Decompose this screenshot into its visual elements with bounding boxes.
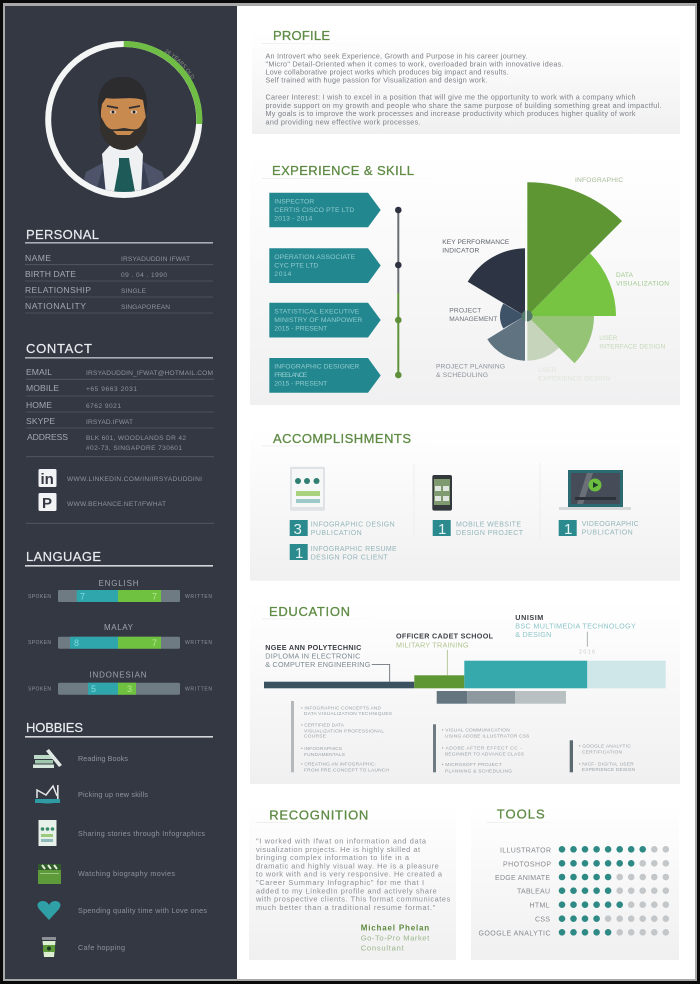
item: mobile website <box>433 520 524 538</box>
course list: infographics: COURSE <box>304 734 326 740</box>
icon: linkedin <box>38 469 56 488</box>
section: contact: +65 9663 2031 <box>86 386 137 393</box>
panel: sidebar <box>5 6 237 979</box>
profile text: "Micro" Detail-Oriented when it comes to work, overloaded brain with innovative ideas. <box>266 60 564 68</box>
course list: design tools: • ADOBE AFTER EFFECT CC - <box>442 746 522 752</box>
testimonial quote <box>255 836 451 912</box>
tool labels: GOOGLE ANALYTIC <box>478 930 550 937</box>
heading: accomplishments: ACCOMPLISHMENTS <box>273 431 411 446</box>
section: hobbies: Spending quality time with Love ones <box>78 906 207 915</box>
section: personal: IRSYADUDDIN IFWAT <box>121 256 190 263</box>
section: personal: PERSONAL <box>26 227 99 242</box>
chart labels: INDICATOR <box>442 248 480 255</box>
experience arrows: CYC PTE LTD <box>274 262 318 270</box>
course list: certifications: EXPERIENCE DESIGN <box>582 767 636 773</box>
course list: certifications: • GOOGLE ANALYTIC <box>579 743 631 749</box>
tool labels: TABLEAU <box>517 889 550 896</box>
icon: heart <box>38 901 60 920</box>
section: contact: CONTACT <box>26 341 92 356</box>
education labels <box>265 613 636 669</box>
section: personal: NATIONALITY <box>25 301 86 311</box>
course list: infographics: • INFOGRAPHICS <box>301 746 342 752</box>
tool labels: CSS <box>535 917 550 924</box>
course list: infographics: FROM PRE-CONCEPT TO LAUNCH <box>304 768 390 774</box>
icon: linkedin: in <box>40 471 54 488</box>
education labels: DIPLOMA IN ELECTRONIC <box>265 652 360 660</box>
course list: design tools <box>433 724 529 774</box>
item: mobile website: DESIGN PROJECT <box>456 530 524 537</box>
item: videographic: PUBLICATION <box>582 530 633 536</box>
section: personal: SINGAPOREAN <box>121 304 170 311</box>
chart labels: PROJECT <box>449 308 481 314</box>
english bar: 7 <box>152 592 157 602</box>
section: hobbies: Picking up new skills <box>78 790 148 799</box>
testimonial quote: "Career Summary Infographic" for me that I <box>256 878 424 887</box>
course list: infographics: • CERTIFIED DATA <box>301 723 345 729</box>
section: hobbies: Sharing stories through Infographics <box>78 829 205 838</box>
testimonial quote: dramatic and highly visual way. He is a pleasure <box>256 861 439 870</box>
section: hobbies: HOBBIES <box>26 720 83 735</box>
course list: infographics: DATA VISUALIZATION TECHNIQUES <box>304 711 392 717</box>
section: personal: 09 . 04 . 1990 <box>121 272 167 279</box>
section: contact: EMAIL <box>26 367 52 377</box>
experience arrows: FREELANCE <box>274 372 308 379</box>
item: infographic publication <box>290 520 395 538</box>
panel: experience and skill <box>250 155 680 405</box>
item: videographic: 1 <box>564 521 572 538</box>
chart labels: USER <box>538 367 557 374</box>
education labels: MILITARY TRAINING <box>396 640 469 649</box>
section: hobbies: Reading Books <box>78 754 128 763</box>
testimonial quote: visualization projects. He is highly skilled at <box>256 845 420 854</box>
experience arrows: 2015 - PRESENT <box>274 326 327 332</box>
testimonial quote: "I worked with Ifwat on information and data <box>256 836 427 846</box>
education timeline bars: 2016 <box>579 650 595 656</box>
profile text <box>266 52 662 126</box>
experience arrows <box>269 193 381 393</box>
experience arrows: OPERATION ASSOCIATE <box>274 254 356 261</box>
section: personal: SINGLE <box>121 288 147 295</box>
profile text: Career Interest: I wish to excel in a position that will give me the opportunity to work with a company which <box>266 92 635 102</box>
section: personal: NAME <box>25 253 51 263</box>
course list: infographics: VISUALIZATION PROFESSIONAL <box>304 728 384 734</box>
testimonial author: Michael Phelan <box>361 924 429 933</box>
heading: tools: TOOLS <box>497 806 545 822</box>
education labels: NGEE ANN POLYTECHNIC <box>265 643 361 652</box>
course list: certifications: CERTIFICATION <box>582 749 623 755</box>
chart labels: MANAGEMENT <box>449 316 497 323</box>
avatar with age ring <box>45 41 202 198</box>
item: mobile website: MOBILE WEBSITE <box>456 522 521 528</box>
chart labels <box>436 177 669 382</box>
malay bar: 7 <box>152 638 157 648</box>
section: contact: HOME <box>26 400 52 410</box>
course list: infographics: • INFOGRAPHIC CONCEPTS AND <box>301 705 382 711</box>
indonesian bar: SPOKEN <box>28 686 51 692</box>
indonesian bar: 5 <box>91 684 96 694</box>
section: contact: #02-73, SINGAPORE 730601 <box>86 445 182 452</box>
english bar: WRITTEN <box>185 594 212 600</box>
education timeline bars <box>264 632 666 704</box>
experience arrows: 2013 - 2014 <box>274 216 313 222</box>
experience arrows: MINISTRY OF MANPOWER <box>274 317 362 324</box>
item: mobile website: 1 <box>438 521 446 538</box>
indonesian bar: 3 <box>127 684 132 694</box>
tool rating dots <box>559 846 669 936</box>
chart labels: INFOGRAPHIC <box>575 177 623 184</box>
icon: tablet <box>290 467 325 511</box>
testimonial author: Go-To-Pro Market <box>361 934 430 943</box>
profile text: My goals is to improve the work processes and increase productivity which produces higher quality of work <box>266 109 636 118</box>
avatar with age ring: 26 YEARS OLD <box>164 49 194 78</box>
icon: behance: P <box>42 495 52 512</box>
malay bar: MALAY <box>104 623 134 632</box>
malay bar: SPOKEN <box>28 640 51 646</box>
item: videographic: VIDEOGRAPHIC <box>582 521 639 528</box>
panel: education <box>250 600 680 784</box>
course list: certifications <box>570 740 636 773</box>
panel: accomplishments <box>250 430 680 581</box>
heading: experience: EXPERIENCE & SKILL <box>272 163 414 178</box>
icon: skills <box>35 785 60 804</box>
heading: recognition: RECOGNITION <box>269 808 368 822</box>
chart labels: INTERFACE DESIGN <box>599 344 666 350</box>
experience timeline <box>395 207 402 378</box>
malay bar: WRITTEN <box>185 640 212 646</box>
section: contact: 6762 9021 <box>86 403 121 410</box>
section: contact <box>25 341 214 523</box>
section: language: LANGUAGE <box>26 549 101 564</box>
profile text: Self trained with huge passion for Visualization and design work. <box>266 76 488 84</box>
malay bar: 8 <box>74 638 79 648</box>
section: hobbies: Cafe hopping <box>78 943 125 952</box>
indonesian bar <box>28 670 212 695</box>
icon: laptop <box>559 470 631 510</box>
course list: infographics <box>291 701 392 774</box>
item: resume design <box>290 544 397 562</box>
course list: infographics: FUNDAMENTALS <box>304 752 345 758</box>
course list: design tools: BEGINNER TO ADVANCE CLASS <box>445 752 524 758</box>
education labels: OFFICER CADET SCHOOL <box>396 632 494 641</box>
item: videographic <box>559 520 639 538</box>
course list: design tools: USING ADOBE ILLUSTRATOR CS6 <box>445 734 529 740</box>
icon: infographic sheet <box>38 820 56 846</box>
section: contact: SKYPE <box>26 416 55 426</box>
experience arrows: INSPECTOR <box>274 198 314 206</box>
english bar: ENGLISH <box>98 579 139 588</box>
section: contact: BLK 601, WOODLANDS DR 42 <box>86 435 186 442</box>
chart labels: & SCHEDULING <box>436 372 488 379</box>
icon: behance <box>38 493 56 512</box>
icon: clapperboard <box>38 864 61 884</box>
course list: certifications: • NICF- DIGITAL USER <box>579 761 634 767</box>
icon: books <box>33 749 62 768</box>
section: hobbies: Watching biography movies <box>78 869 175 878</box>
item: infographic publication: INFOGRAPHIC DESIGN <box>311 522 395 528</box>
tool labels: EDGE ANIMATE <box>495 875 550 882</box>
chart labels: VISUALIZATION <box>616 280 669 288</box>
section: hobbies <box>25 720 213 957</box>
panel: tools <box>471 802 679 960</box>
section: language <box>25 549 213 695</box>
testimonial quote: to work with and is very responsive. He created a <box>256 870 443 879</box>
chart labels: PROJECT PLANNING <box>436 364 505 370</box>
education labels: UNISIM <box>515 613 543 622</box>
item: resume design: INFOGRAPHIC RESUME <box>311 546 397 553</box>
education labels: & DESIGN <box>515 630 551 639</box>
section: contact: MOBILE <box>26 383 59 393</box>
testimonial quote: much better than a traditional resume format." <box>256 903 436 912</box>
course list: design tools: • MICROSOFT PROJECT <box>442 762 502 768</box>
item: resume design: 1 <box>295 545 303 562</box>
english bar: 7 <box>80 592 85 602</box>
heading: profile: PROFILE <box>273 28 330 43</box>
section: personal: BIRTH DATE <box>25 269 76 279</box>
section: contact: ADDRESS <box>27 432 68 442</box>
chart labels: DATA <box>616 272 634 279</box>
experience arrows: INFOGRAPHIC DESIGNER <box>274 364 359 370</box>
item: infographic publication: 3 <box>294 521 302 538</box>
profile text: and providing new effective work processes. <box>266 117 420 126</box>
testimonial author: Consultant <box>361 943 405 952</box>
heading: education <box>262 604 387 619</box>
heading: tools <box>487 806 577 823</box>
testimonial quote: added to my LinkedIn profile and actively share <box>256 886 437 895</box>
profile text: provide support on my growth and people who share the same purpose of building something great and impactful. <box>266 101 662 110</box>
heading: profile <box>262 28 372 44</box>
testimonial quote: with prospective clients. This format communicates <box>255 895 451 904</box>
experience arrows: CERTIS CISCO PTE LTD <box>274 207 354 214</box>
experience arrows: 2014 <box>274 271 292 278</box>
chart labels: EXPERIENCE DESIGN <box>538 376 611 382</box>
section: personal: RELATIONSHIP <box>25 285 91 295</box>
panel: recognition <box>249 802 456 960</box>
heading: education: EDUCATION <box>269 604 350 619</box>
testimonial quote: bringing complex information to life in a <box>256 853 410 862</box>
course list: design tools: • VISUAL COMMUNICATION <box>442 728 510 734</box>
profile text: An Introvert who seek Experience, Growth and Purpose in his career journey. <box>266 52 528 60</box>
chart labels: USER <box>599 335 618 342</box>
tool labels <box>478 848 551 937</box>
indonesian bar: WRITTEN <box>185 686 212 692</box>
experience arrows: STATISTICAL EXECUTIVE <box>274 308 360 316</box>
tool labels: HTML <box>530 903 550 910</box>
item: infographic publication: PUBLICATION <box>311 530 362 537</box>
english bar <box>28 579 212 602</box>
indonesian bar: INDONESIAN <box>90 670 147 680</box>
english bar: SPOKEN <box>28 594 51 600</box>
malay bar <box>28 623 212 649</box>
tool labels: ILLUSTRATOR <box>500 848 551 854</box>
section: contact: IRSYAD.IFWAT <box>86 419 133 426</box>
profile text: Love collaborative project works which produces big impact and results. <box>266 68 508 76</box>
icon: coffee cup <box>42 937 56 957</box>
tool labels: PHOTOSHOP <box>503 862 551 868</box>
section: personal <box>25 227 213 313</box>
chart labels: KEY PERFORMANCE <box>442 239 510 246</box>
education labels: BSC MULTIMEDIA TECHNOLOGY <box>515 622 636 631</box>
polar skill chart <box>468 182 622 363</box>
education labels: & COMPUTER ENGINEERING <box>265 660 371 669</box>
panel: profile <box>252 28 680 134</box>
course list: design tools: PLANNING & SCHEDULING <box>445 768 512 774</box>
icon: phone <box>432 475 452 511</box>
course list: infographics: • CREATING AN INFOGRAPHIC: <box>301 762 376 768</box>
section: contact: WWW.BEHANCE.NET/IFWHAT <box>67 501 166 508</box>
testimonial author <box>361 924 430 952</box>
section: contact: WWW.LINKEDIN.COM/IN/IRSYADUDDINI <box>67 476 202 483</box>
section: contact: IRSYADUDDIN_IFWAT@HOTMAIL.COM <box>86 370 213 377</box>
item: resume design: DESIGN FOR CLIENT <box>311 554 388 562</box>
experience arrows: 2015 - PRESENT <box>274 380 327 388</box>
